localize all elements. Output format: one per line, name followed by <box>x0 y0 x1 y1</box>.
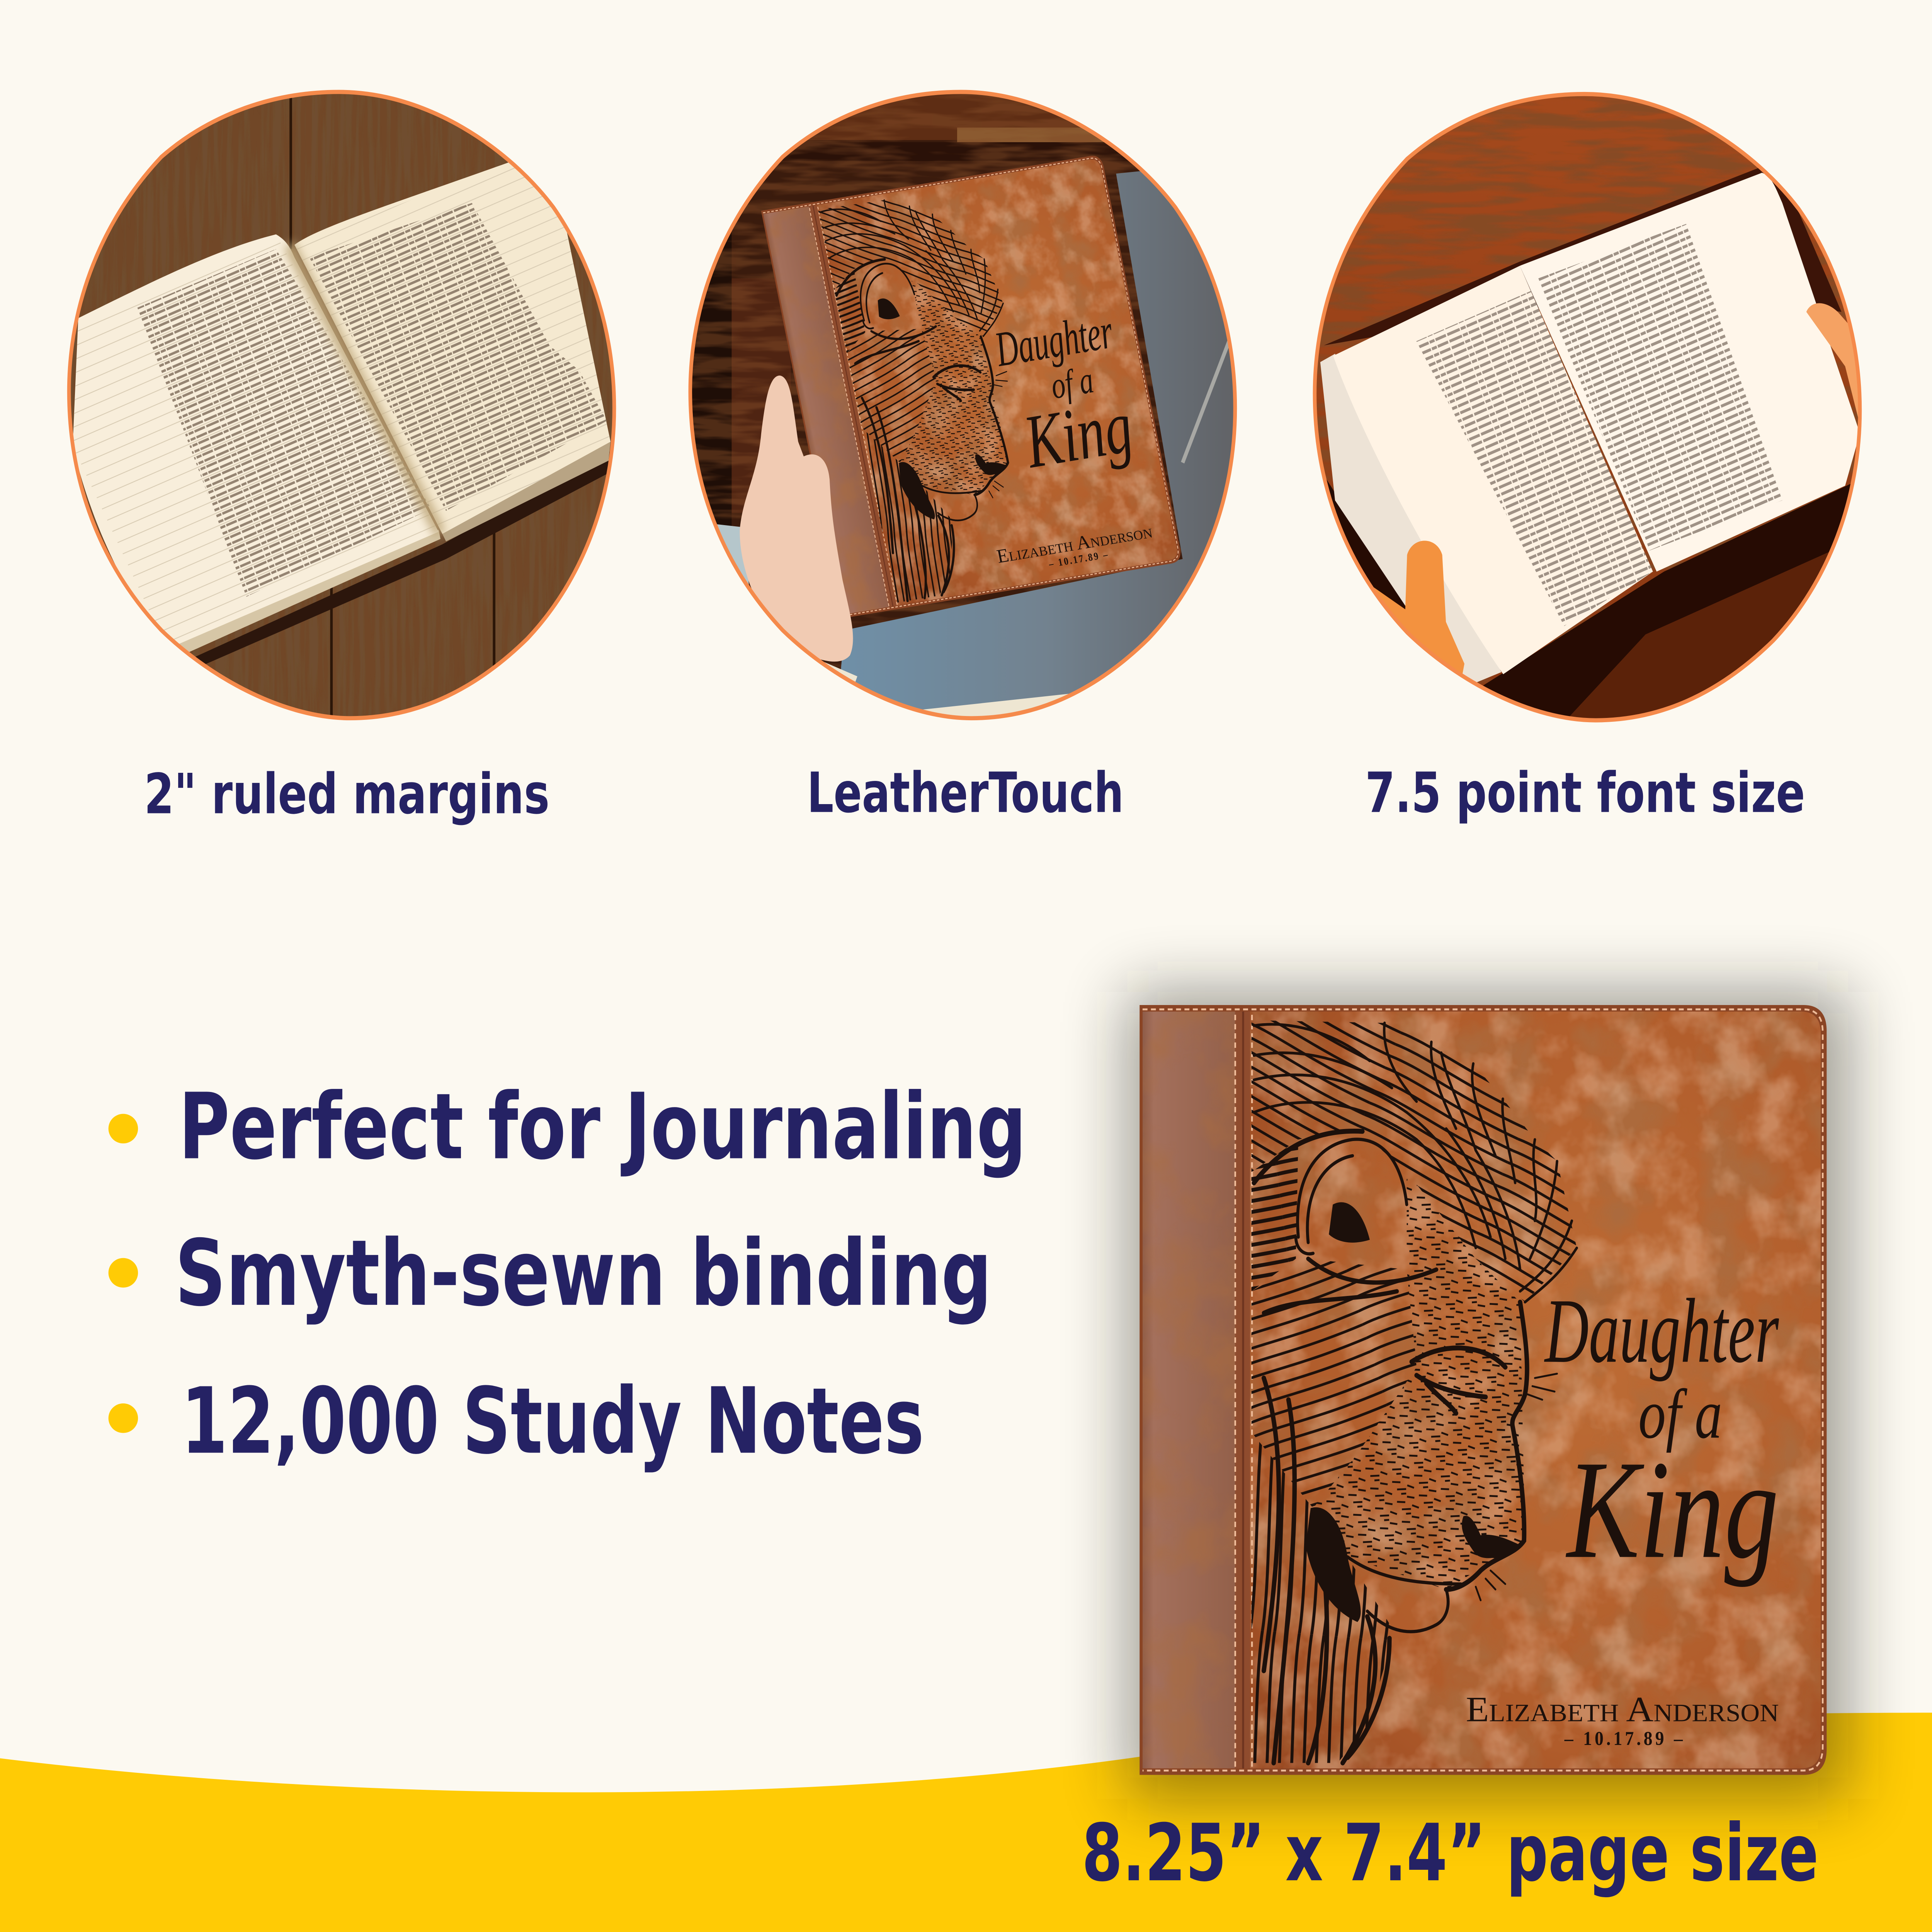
panel: main leather cover <box>1139 1005 1827 1775</box>
leather cover in photo <box>761 154 1182 618</box>
cover name and date: Elizabeth Anderson <box>1466 1690 1779 1729</box>
icon: right fingers <box>1806 303 1860 425</box>
caption: ruled margins: 2" ruled margins <box>144 762 549 827</box>
feature list <box>109 1073 1026 1475</box>
cover title: of a <box>1047 359 1097 407</box>
feature: journaling: Perfect for Journaling <box>179 1073 1026 1180</box>
cover title: Daughter <box>1544 1280 1779 1382</box>
cover name <box>995 521 1156 578</box>
cover title <box>1544 1280 1779 1588</box>
panel: font size photo <box>1294 77 1874 734</box>
photo frame <box>1315 94 1860 720</box>
bullet two <box>109 1258 138 1287</box>
photo frame <box>690 92 1235 718</box>
icon: hand holding cover <box>740 376 853 662</box>
cover title: of a <box>1638 1375 1722 1453</box>
cover title: King <box>1017 384 1139 484</box>
cover name and date <box>1466 1690 1779 1750</box>
panel: LeatherTouch photo <box>676 77 1256 734</box>
bullet three <box>109 1403 138 1433</box>
yellow wave band <box>0 1713 1932 1932</box>
cover title: Daughter <box>990 303 1117 377</box>
caption: LeatherTouch: LeatherTouch <box>807 760 1124 825</box>
panel: ruled margins photo <box>58 77 638 734</box>
cover title <box>990 303 1139 486</box>
cover drop shadow <box>1128 992 1848 1799</box>
cover name: Elizabeth Anderson <box>995 521 1154 568</box>
photo frame <box>69 92 614 718</box>
caption: font size: 7.5 point font size <box>1365 760 1805 825</box>
cover title: King <box>1565 1432 1779 1588</box>
feature: binding: Smyth-sewn binding <box>175 1220 992 1327</box>
icon: left hand <box>1357 541 1464 693</box>
cover name: – 10.17.89 – <box>1048 549 1109 570</box>
cover name and date: – 10.17.89 – <box>1564 1728 1683 1750</box>
feature: study notes: 12,000 Study Notes <box>181 1368 924 1475</box>
bullet one <box>109 1114 138 1143</box>
